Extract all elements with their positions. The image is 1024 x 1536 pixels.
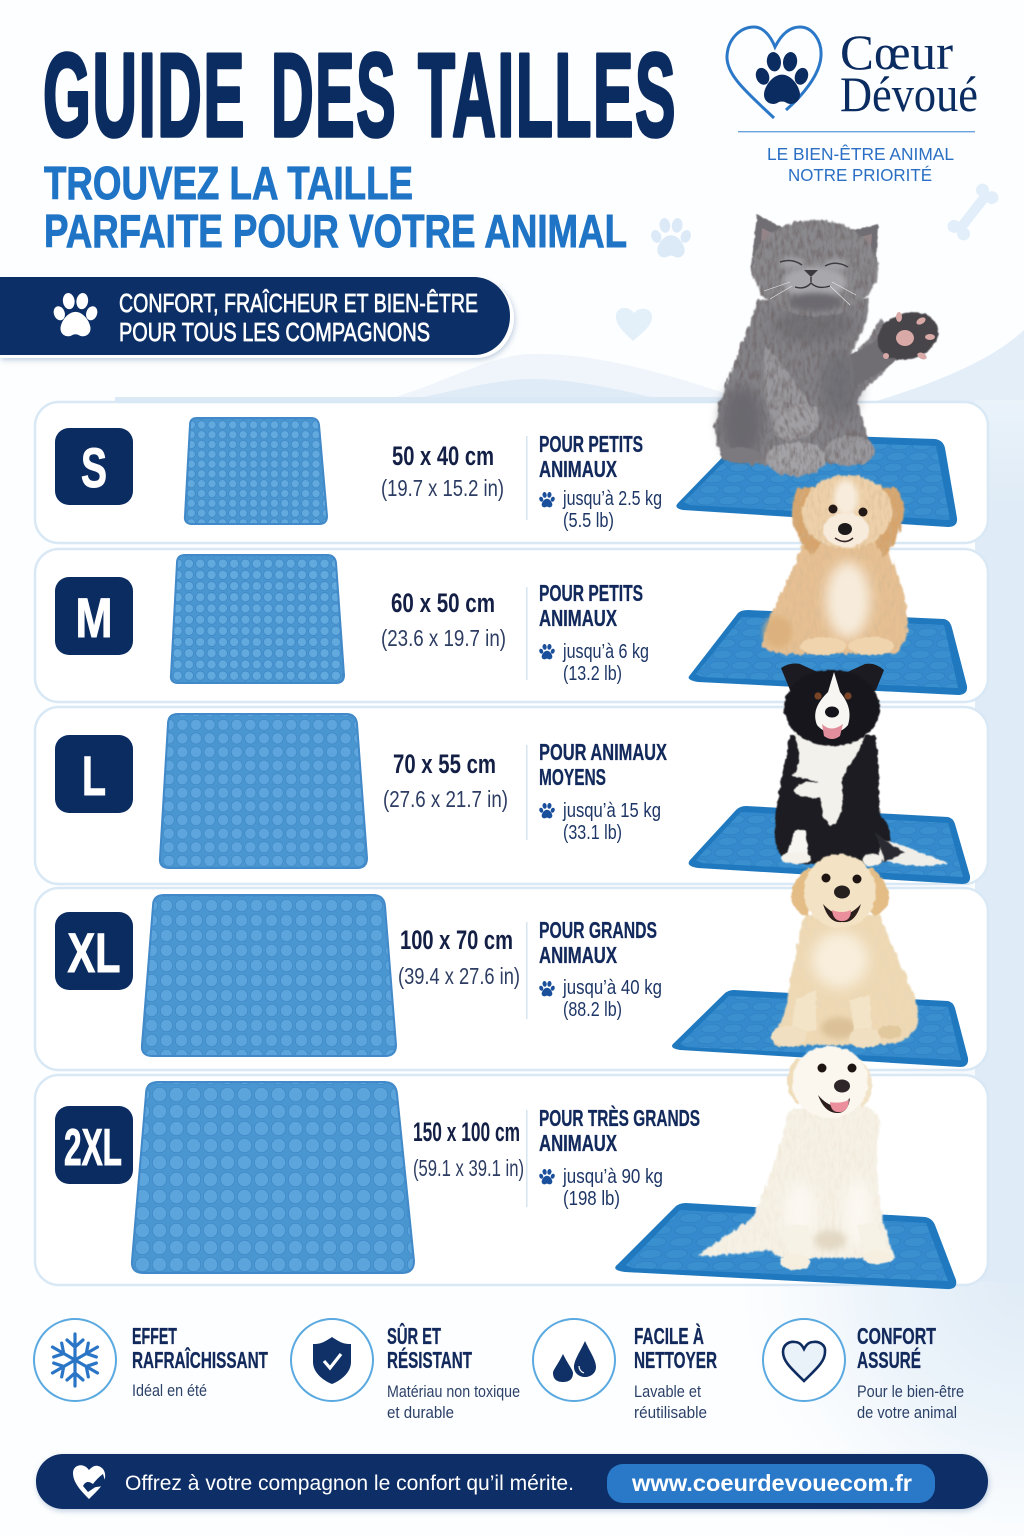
feature: easy to clean: réutilisable bbox=[634, 1403, 707, 1422]
info 2XL: (198 lb) bbox=[563, 1188, 620, 1210]
website button: www.coeurdevouecom.fr bbox=[631, 1470, 912, 1496]
dimensions XL: 100 x 70 cm bbox=[400, 925, 513, 955]
info XL: POUR GRANDS bbox=[539, 917, 657, 943]
info M: POUR PETITS bbox=[539, 580, 643, 606]
title: GUIDE bbox=[43, 29, 246, 162]
decorative heart bbox=[616, 308, 652, 341]
info XL: (88.2 lb) bbox=[563, 999, 622, 1021]
dimensions M: 60 x 50 cm bbox=[391, 588, 495, 618]
logo: LE BIEN-ÊTRE ANIMAL bbox=[767, 144, 954, 164]
dimensions L bbox=[383, 749, 508, 812]
badge M bbox=[55, 577, 133, 655]
info S: POUR PETITS bbox=[539, 431, 643, 457]
mat M bbox=[171, 555, 344, 683]
info M: jusqu’à 6 kg bbox=[562, 641, 649, 663]
info L bbox=[539, 739, 667, 844]
feature: comfort bbox=[763, 1319, 964, 1422]
mat S bbox=[185, 418, 327, 524]
feature: comfort: Pour le bien-être bbox=[857, 1382, 964, 1401]
info XL: jusqu’à 40 kg bbox=[562, 977, 662, 999]
feature: comfort: CONFORT bbox=[857, 1323, 936, 1349]
info 2XL bbox=[539, 1104, 700, 1210]
title: DES bbox=[271, 29, 397, 162]
badge S bbox=[55, 428, 133, 505]
icon: heart and paw bbox=[73, 1465, 106, 1499]
mat XL bbox=[142, 895, 396, 1056]
decorative bone bbox=[945, 181, 1001, 243]
feature: easy to clean bbox=[533, 1319, 717, 1422]
subtitle: PARFAITE POUR VOTRE ANIMAL bbox=[44, 205, 627, 257]
info L: POUR ANIMAUX bbox=[539, 739, 667, 765]
feature: comfort: ASSURÉ bbox=[857, 1346, 921, 1373]
dimensions 2XL: 150 x 100 cm bbox=[413, 1117, 520, 1147]
mat with border collie bbox=[689, 806, 970, 884]
feature: safe bbox=[291, 1319, 520, 1422]
info 2XL: ANIMAUX bbox=[539, 1130, 617, 1156]
feature: easy to clean: NETTOYER bbox=[634, 1347, 717, 1373]
panel: size M bbox=[35, 475, 988, 702]
icon: snowflake bbox=[34, 1319, 116, 1401]
dimensions M bbox=[381, 588, 506, 651]
panel: size S bbox=[35, 214, 988, 543]
white dog bbox=[698, 1046, 895, 1270]
fluffy dog bbox=[763, 475, 908, 655]
feature: safe: et durable bbox=[387, 1403, 454, 1422]
badge L: L bbox=[82, 744, 106, 807]
dimensions 2XL bbox=[413, 1117, 524, 1181]
panel: size 2XL bbox=[35, 1046, 988, 1289]
info S: ANIMAUX bbox=[539, 456, 617, 482]
logo: NOTRE PRIORITÉ bbox=[788, 165, 932, 185]
feature: cooling: EFFET bbox=[132, 1323, 177, 1349]
banner: POUR TOUS LES COMPAGNONS bbox=[119, 317, 430, 347]
subtitle: TROUVEZ LA TAILLE bbox=[44, 157, 413, 209]
dimensions L: (27.6 x 21.7 in) bbox=[383, 786, 508, 812]
dimensions S: 50 x 40 cm bbox=[392, 441, 494, 471]
cat bbox=[715, 214, 945, 476]
golden dog bbox=[771, 854, 919, 1048]
decorative paw bbox=[649, 217, 693, 257]
feature: cooling bbox=[34, 1319, 268, 1401]
dimensions 2XL: (59.1 x 39.1 in) bbox=[413, 1155, 524, 1181]
badge XL bbox=[55, 912, 133, 990]
badge 2XL: 2XL bbox=[64, 1119, 122, 1177]
footer message: Offrez à votre compagnon le confort qu’il mérite. bbox=[125, 1472, 574, 1495]
badge M: M bbox=[76, 586, 112, 649]
info 2XL: jusqu’à 90 kg bbox=[562, 1166, 663, 1188]
info L: MOYENS bbox=[539, 764, 606, 790]
feature: safe: Matériau non toxique bbox=[387, 1382, 520, 1401]
info L: (33.1 lb) bbox=[563, 822, 622, 844]
icon: heart bbox=[763, 1319, 845, 1401]
info S: (5.5 lb) bbox=[563, 510, 614, 532]
dimensions XL: (39.4 x 27.6 in) bbox=[398, 963, 520, 989]
website button bbox=[607, 1464, 935, 1503]
feature: cooling: RAFRAÎCHISSANT bbox=[132, 1346, 268, 1373]
panel: size L bbox=[35, 664, 988, 884]
badge 2XL bbox=[55, 1106, 133, 1184]
badge XL: XL bbox=[68, 921, 120, 984]
feature: safe: RÉSISTANT bbox=[387, 1346, 472, 1373]
panel: size XL bbox=[35, 854, 988, 1070]
info M: ANIMAUX bbox=[539, 605, 617, 631]
title: TAILLES bbox=[418, 29, 677, 162]
badge L bbox=[55, 735, 133, 813]
mat with golden dog bbox=[672, 990, 968, 1067]
logo bbox=[727, 24, 978, 185]
icon: shield bbox=[291, 1319, 373, 1401]
subtitle bbox=[44, 157, 627, 257]
border collie bbox=[775, 664, 948, 866]
logo: Cœur bbox=[840, 24, 953, 80]
banner: CONFORT, FRAÎCHEUR ET BIEN-ÊTRE bbox=[119, 288, 478, 318]
mat 2XL bbox=[132, 1082, 414, 1273]
feature: easy to clean: Lavable et bbox=[634, 1382, 701, 1401]
info S: jusqu’à 2.5 kg bbox=[562, 488, 662, 510]
icon: water drops bbox=[533, 1319, 615, 1401]
dimensions M: (23.6 x 19.7 in) bbox=[381, 625, 506, 651]
badge S: S bbox=[81, 436, 107, 499]
dimensions L: 70 x 55 cm bbox=[393, 749, 496, 779]
footer bar bbox=[36, 1454, 988, 1509]
dimensions S bbox=[381, 441, 504, 501]
mat with cat bbox=[676, 433, 957, 527]
title bbox=[43, 29, 677, 162]
feature: safe: SÛR ET bbox=[387, 1322, 441, 1349]
feature: easy to clean: FACILE À bbox=[634, 1322, 704, 1349]
info S bbox=[539, 431, 662, 532]
info M: (13.2 lb) bbox=[563, 663, 622, 685]
mat with fluffy dog bbox=[689, 610, 967, 695]
feature: comfort: de votre animal bbox=[857, 1403, 957, 1422]
dimensions XL bbox=[398, 925, 520, 989]
info XL: ANIMAUX bbox=[539, 942, 617, 968]
mat L bbox=[160, 714, 367, 868]
info XL bbox=[539, 917, 662, 1021]
logo: Dévoué bbox=[840, 66, 978, 122]
mat with white dog bbox=[615, 1203, 956, 1289]
feature: cooling: Idéal en été bbox=[132, 1381, 207, 1400]
info L: jusqu’à 15 kg bbox=[562, 800, 661, 822]
info M bbox=[539, 580, 649, 685]
info 2XL: POUR TRÈS GRANDS bbox=[539, 1104, 700, 1131]
banner bbox=[0, 277, 514, 358]
dimensions S: (19.7 x 15.2 in) bbox=[381, 475, 504, 501]
